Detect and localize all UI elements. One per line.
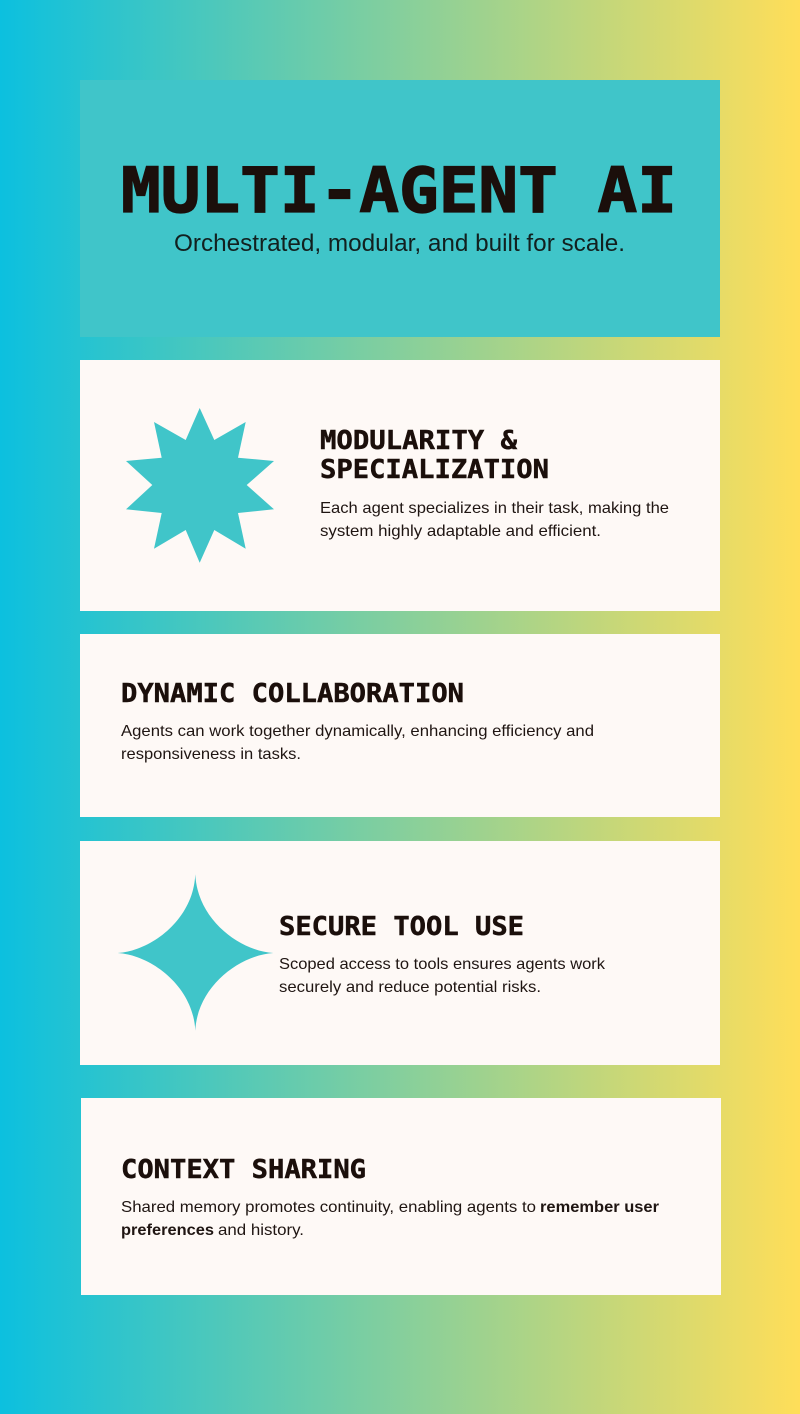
text: collaboration description (121, 723, 594, 763)
text: context description: and history. (218, 1222, 304, 1239)
heading: secure tool use: SECURE TOOL USE (279, 912, 524, 942)
subtitle: Orchestrated, modular, and built for scale. (174, 230, 625, 257)
heading: modularity and specialization (320, 426, 549, 485)
text: context description (121, 1199, 659, 1239)
panel: dynamic collaboration (80, 634, 720, 817)
text: context description: preferences (121, 1222, 214, 1239)
text: secure tool description: securely and reduce potential risks. (279, 979, 541, 996)
text: context description: Shared memory promotes continuity, enabling agents to (121, 1199, 536, 1216)
text: modularity description: system highly adaptable and efficient. (320, 523, 601, 540)
icon: ten-point star (126, 408, 274, 563)
panel: title header (80, 80, 720, 337)
panel: secure tool use (80, 841, 720, 1065)
heading: context sharing: CONTEXT SHARING (121, 1155, 366, 1185)
panel: context sharing (81, 1098, 721, 1295)
heading: dynamic collaboration: DYNAMIC COLLABORATION (121, 679, 464, 709)
heading: modularity and specialization: MODULARITY & (320, 426, 517, 456)
heading: modularity and specialization: SPECIALIZATION (320, 455, 549, 485)
text: collaboration description: Agents can work together dynamically, enhancing efficiency and (121, 723, 594, 740)
text: modularity description: Each agent specializes in their task, making the (320, 500, 669, 517)
text: context description: remember user (540, 1199, 659, 1216)
text: collaboration description: responsiveness in tasks. (121, 746, 301, 763)
text: secure tool description: Scoped access to tools ensures agents work (279, 956, 606, 973)
icon: four-point sparkle (118, 874, 273, 1031)
title: MULTI-AGENT AI (121, 154, 677, 227)
text: secure tool description (279, 956, 606, 996)
text: modularity description (320, 500, 669, 540)
panel: modularity and specialization (80, 360, 720, 611)
